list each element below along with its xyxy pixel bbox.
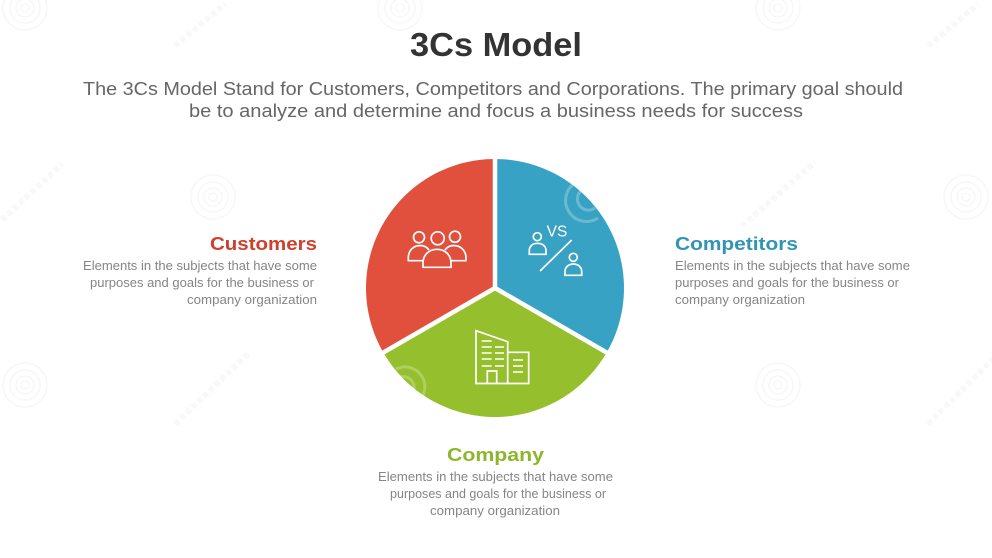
- watermark on blue: [566, 183, 598, 221]
- text: company description: Elements in the subjects that have some: [378, 470, 613, 484]
- icon: competitors versus: VS: [547, 224, 567, 240]
- subtitle: The 3Cs Model Stand for Customers, Competitors and Corporations. The primary goal should: [83, 78, 903, 99]
- text: customers description: Elements in the subjects that have some: [83, 259, 317, 273]
- text: company description: purposes and goals for the business or: [390, 487, 606, 501]
- icon: competitors versus: [529, 224, 582, 275]
- segment dividers: [380, 155, 610, 354]
- text: company description: company organization: [430, 504, 560, 518]
- text: competitors description: [675, 259, 910, 307]
- icon: company building: [476, 331, 529, 384]
- icon: customers group: [408, 231, 466, 267]
- segment: competitors: [495, 159, 624, 352]
- title: 3Cs Model: [410, 26, 582, 63]
- subtitle: be to analyze and determine and focus a business needs for success: [189, 100, 803, 121]
- text: competitors description: Elements in the subjects that have some: [675, 259, 910, 273]
- segment: customers: [366, 159, 495, 352]
- watermark background: [2, 0, 992, 424]
- pie chart: [366, 155, 624, 417]
- text: competitors description: company organization: [675, 293, 805, 307]
- text: company description: [378, 470, 613, 518]
- text: customers description: company organization: [187, 293, 317, 307]
- panel: company: [378, 444, 613, 518]
- watermark on green: [396, 367, 425, 400]
- heading: company: Company: [447, 444, 545, 465]
- segment: company: [383, 288, 607, 417]
- text: competitors description: purposes and goals for the business or: [675, 276, 899, 290]
- heading: customers: Customers: [210, 233, 317, 254]
- subtitle: [83, 78, 903, 121]
- panel: customers: [83, 233, 317, 307]
- heading: competitors: Competitors: [675, 233, 798, 254]
- panel: competitors: [675, 233, 910, 307]
- text: customers description: purposes and goals for the business or: [90, 276, 314, 290]
- text: customers description: [83, 259, 317, 307]
